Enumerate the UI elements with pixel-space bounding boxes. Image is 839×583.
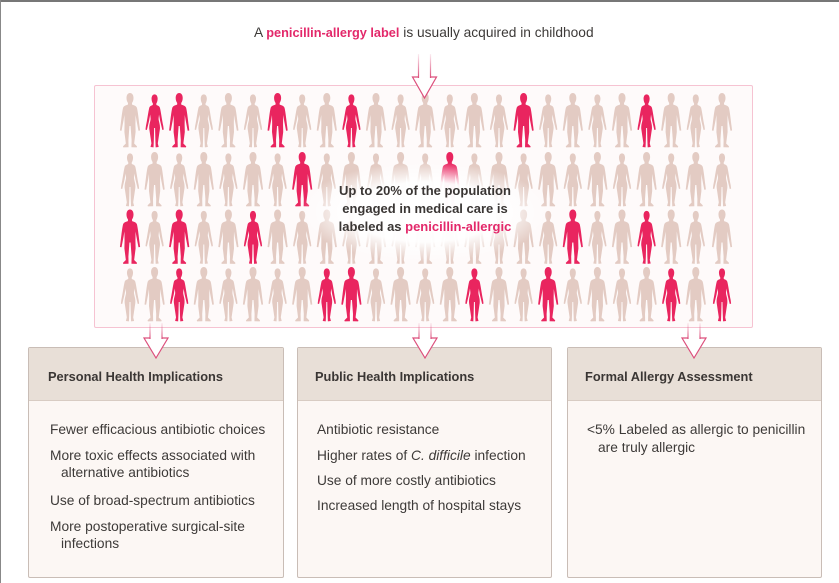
card: personal health implications: [28, 347, 284, 578]
callout: engaged in medical care is: [342, 201, 508, 216]
panel: population pictogram: [94, 85, 753, 328]
card: formal allergy assessment: <5% Labeled as allergic to penicillin: [587, 422, 805, 437]
card: personal health implications: Use of broad-spectrum antibiotics: [50, 493, 255, 508]
callout: [339, 183, 511, 234]
card: formal allergy assessment: [567, 347, 822, 578]
card: formal allergy assessment: Formal Allergy Assessment: [585, 369, 753, 384]
title: A penicillin-allergy label is usually acquired in childhood: [254, 25, 594, 40]
callout: labeled as penicillin-allergic: [339, 219, 511, 234]
callout: Up to 20% of the population: [339, 183, 511, 198]
card: personal health implications: More toxic effects associated with: [50, 448, 255, 463]
card: public health implications: [297, 347, 552, 578]
card: formal allergy assessment: are truly allergic: [598, 440, 695, 455]
card: personal health implications: Personal Health Implications: [48, 369, 223, 384]
card: public health implications: Increased length of hospital stays: [317, 498, 521, 513]
white fade behind callout: [300, 162, 550, 262]
people row 4: [121, 267, 731, 321]
card: public health implications: Use of more costly antibiotics: [317, 473, 496, 488]
arrow: title to population: [412, 54, 436, 98]
card: public health implications: Higher rates of C. difficile infection: [317, 448, 526, 463]
card: personal health implications: alternative antibiotics: [61, 465, 189, 480]
people row 1: [120, 93, 732, 147]
card: personal health implications: infections: [61, 536, 119, 551]
card: public health implications: Antibiotic resistance: [317, 422, 439, 437]
people row 2: [121, 152, 731, 206]
card: personal health implications: More postoperative surgical-site: [50, 519, 245, 534]
card: personal health implications: Fewer efficacious antibiotic choices: [50, 422, 265, 437]
people row 3: [120, 210, 732, 264]
card: public health implications: Public Health Implications: [315, 369, 474, 384]
window edge lines: [0, 0, 839, 2]
